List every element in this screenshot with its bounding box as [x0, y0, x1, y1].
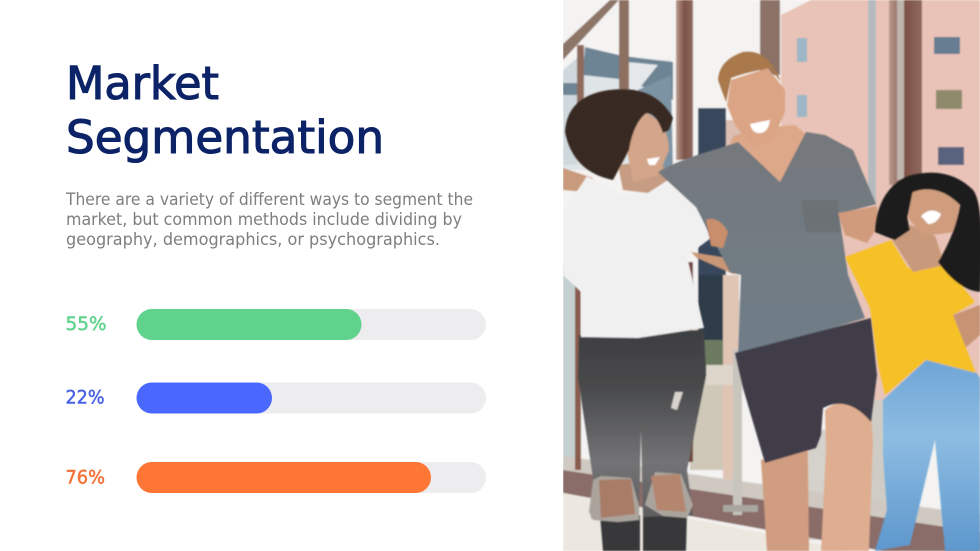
- bar row: 22%: [66, 382, 486, 414]
- bar row: 55%: [66, 309, 486, 340]
- woman on the left: [563, 89, 741, 551]
- background building and windows: [563, 0, 980, 551]
- bar row: 55%: 55%: [66, 314, 106, 335]
- man in the middle: [658, 52, 879, 551]
- bar chart: [66, 309, 486, 493]
- woman on the right: [845, 173, 980, 551]
- body text: There are a variety of different ways to segment the: [65, 190, 473, 209]
- title: Segmentation: [66, 111, 384, 164]
- body text: [65, 190, 473, 249]
- body text: geography, demographics, or psychographics.: [66, 230, 440, 249]
- bar row: 22%: 22%: [66, 388, 104, 408]
- ripped knee openings: [589, 472, 693, 522]
- title: [66, 57, 384, 164]
- photo: three friends laughing: [563, 0, 980, 551]
- bar row: 76%: 76%: [66, 468, 105, 488]
- title: Market: [66, 57, 219, 110]
- body text: market, but common methods include dividing by: [66, 210, 462, 229]
- bar row: 76%: [66, 462, 486, 493]
